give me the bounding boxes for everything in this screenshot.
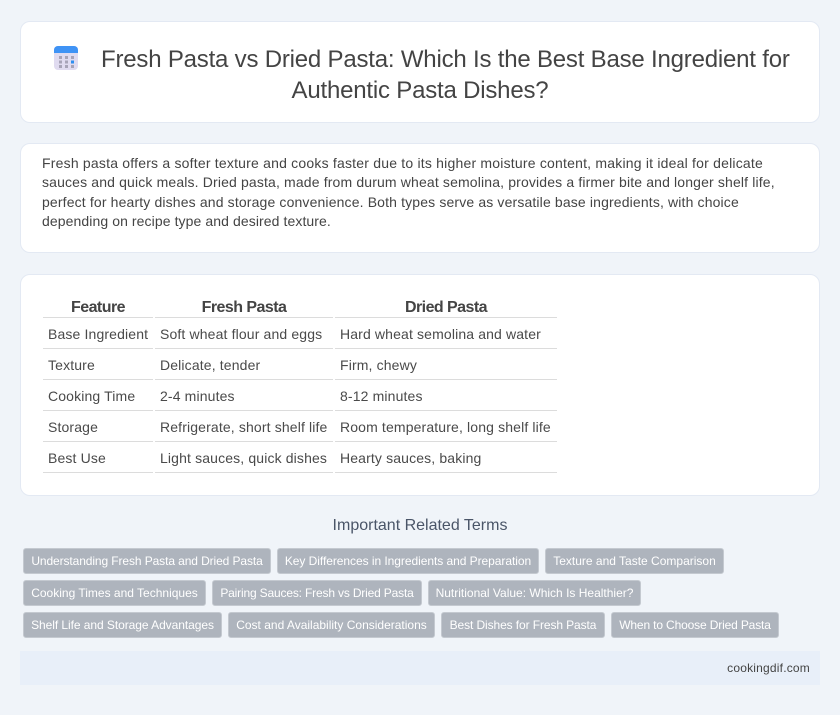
comparison table: 2-4 minutes bbox=[160, 388, 235, 404]
comparison table: 8-12 minutes bbox=[340, 388, 423, 404]
comparison table bbox=[43, 299, 557, 473]
comparison table: Refrigerate, short shelf life bbox=[160, 419, 327, 435]
related terms tags: Texture and Taste Comparison bbox=[553, 554, 716, 568]
comparison table: Hard wheat semolina and water bbox=[340, 326, 541, 342]
comparison table: Light sauces, quick dishes bbox=[160, 450, 327, 466]
title: Fresh Pasta vs Dried Pasta: Which Is the Best Base Ingredient for bbox=[101, 46, 790, 73]
footer bar bbox=[20, 651, 820, 685]
related terms tags bbox=[23, 548, 779, 638]
related terms tags: Shelf Life and Storage Advantages bbox=[31, 618, 214, 632]
related terms tags: Best Dishes for Fresh Pasta bbox=[450, 618, 596, 632]
title: Authentic Pasta Dishes? bbox=[292, 77, 548, 104]
comparison table: Firm, chewy bbox=[340, 357, 417, 373]
related terms tags: When to Choose Dried Pasta bbox=[619, 618, 771, 632]
footer source: cookingdif.com bbox=[727, 661, 810, 675]
panel: comparison table bbox=[20, 274, 820, 496]
intro text: Fresh pasta offers a softer texture and cooks faster due to its higher moisture content, making it ideal for delicate bbox=[42, 155, 763, 171]
comparison table: Dried Pasta bbox=[405, 299, 487, 316]
intro text bbox=[42, 155, 775, 229]
comparison table: Delicate, tender bbox=[160, 357, 260, 373]
intro text: depending on recipe type and desired texture. bbox=[42, 213, 331, 229]
related terms tags: Understanding Fresh Pasta and Dried Pasta bbox=[31, 554, 263, 568]
intro text: perfect for hearty dishes and storage convenience. Both types serve as versatile base ingredients, with choice bbox=[42, 194, 739, 210]
comparison table: Texture bbox=[48, 357, 95, 373]
panel: title card bbox=[20, 21, 820, 123]
panel: intro card bbox=[20, 143, 820, 253]
intro text: sauces and quick meals. Dried pasta, made from durum wheat semolina, provides a firmer bite and longer shelf life, bbox=[42, 174, 775, 190]
comparison table: Fresh Pasta bbox=[202, 299, 286, 316]
related terms tags: Key Differences in Ingredients and Preparation bbox=[285, 554, 531, 568]
comparison table: Storage bbox=[48, 419, 98, 435]
related terms tags: Cost and Availability Considerations bbox=[236, 618, 427, 632]
comparison table: Base Ingredient bbox=[48, 326, 148, 342]
comparison table: Hearty sauces, baking bbox=[340, 450, 481, 466]
comparison table: Cooking Time bbox=[48, 388, 135, 404]
related terms tags: Pairing Sauces: Fresh vs Dried Pasta bbox=[220, 586, 414, 600]
heading: related terms: Important Related Terms bbox=[333, 517, 507, 534]
related terms tags: Cooking Times and Techniques bbox=[31, 586, 198, 600]
comparison table: Soft wheat flour and eggs bbox=[160, 326, 322, 342]
icon: calendar bbox=[54, 46, 78, 70]
comparison table: Feature bbox=[71, 299, 125, 316]
comparison table: Best Use bbox=[48, 450, 106, 466]
related terms tags: Nutritional Value: Which Is Healthier? bbox=[436, 586, 633, 600]
comparison table: Room temperature, long shelf life bbox=[340, 419, 551, 435]
title bbox=[101, 46, 790, 104]
